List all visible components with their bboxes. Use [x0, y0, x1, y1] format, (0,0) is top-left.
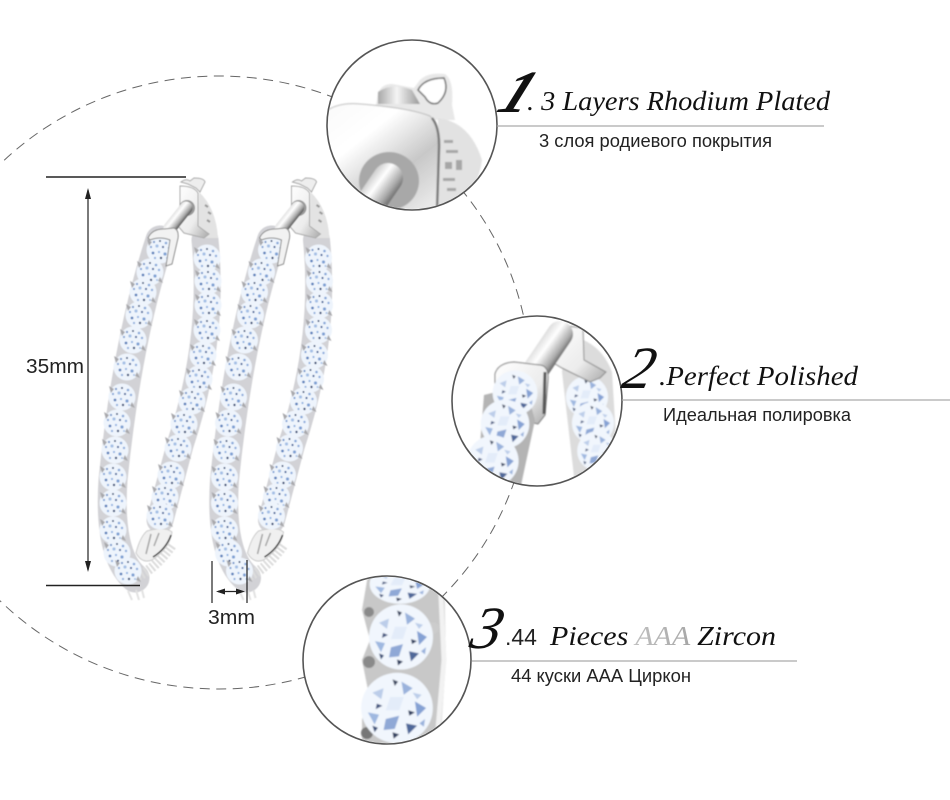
width dimension: 3mm: 3mm — [208, 607, 255, 629]
width dimension: 3mm — [208, 560, 255, 629]
heading 3 — [464, 596, 797, 686]
heading 2: Идеальная полировка — [663, 405, 852, 425]
left earring — [100, 178, 222, 600]
inset circle 2: polish detail — [452, 316, 622, 490]
height dimension: 35mm: 35mm — [26, 356, 84, 378]
inset circle 3: zircon detail — [303, 564, 471, 745]
heading 2: 2 — [617, 336, 663, 402]
clasp — [148, 178, 218, 266]
big dashed circle — [0, 76, 531, 689]
right earring — [211, 178, 333, 600]
heading 3: Pieces AAA Zircon — [549, 621, 776, 651]
heading 1: 1 — [489, 59, 549, 125]
heading 2: .Perfect Polished — [659, 361, 859, 391]
stones — [100, 236, 222, 584]
heading 3: .44 — [505, 624, 537, 650]
heading 1: . 3 Layers Rhodium Plated — [527, 86, 831, 116]
heading 2 — [617, 336, 950, 425]
inner polished tip — [128, 529, 172, 600]
height dimension: 35mm — [26, 177, 186, 586]
heading 3: 3 — [464, 596, 511, 662]
inset circle 1: clasp detail — [325, 40, 497, 222]
heading 1: 3 слоя родиевого покрытия — [539, 131, 772, 151]
heading 3: 44 куски ААА Циркон — [511, 666, 691, 686]
heading 1 — [489, 59, 831, 151]
